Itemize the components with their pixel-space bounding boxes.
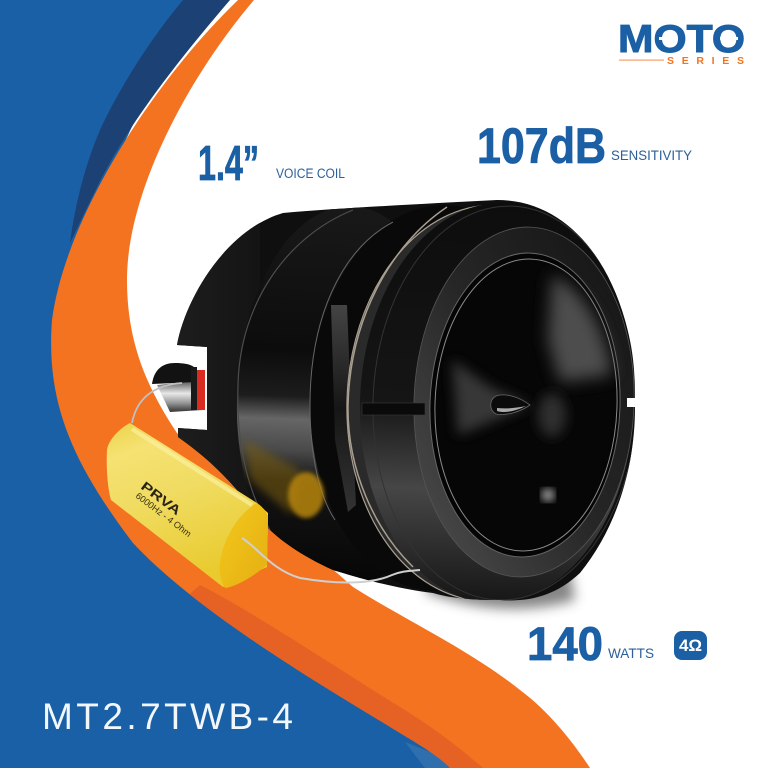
- post dark ring: [191, 367, 197, 410]
- power label: WATTS: [608, 645, 654, 661]
- marker slot: [362, 403, 425, 415]
- swoosh: dark orange shade: [160, 585, 483, 768]
- power value: 140: [527, 617, 603, 670]
- cone: [430, 256, 622, 554]
- impedance badge: [674, 631, 707, 660]
- cone lower right glow: [538, 393, 566, 437]
- logo slit right O: [720, 37, 738, 40]
- binding post connector: [152, 363, 205, 412]
- capacitor end cap: [220, 503, 268, 588]
- gasket edge highlight: [348, 207, 447, 567]
- rim notch: [627, 398, 637, 407]
- sensitivity label: SENSITIVITY: [611, 148, 692, 163]
- product: tweeter driver: [170, 195, 644, 608]
- cone left highlight: [452, 360, 530, 435]
- post red insulator: [197, 370, 205, 410]
- reflection strip: [331, 305, 356, 512]
- model name: MT2.7TWB-4: [42, 696, 296, 737]
- logo slit left O: [659, 37, 676, 40]
- seam highlight: [310, 222, 393, 520]
- logo wordmark: MOTO: [618, 18, 745, 61]
- logo rule: [619, 60, 664, 61]
- gasket ring: [346, 205, 485, 600]
- phase plug tip: [491, 395, 530, 415]
- mid cylinder: [236, 207, 391, 580]
- capacitor brand: PRVA: [138, 478, 185, 519]
- tip highlight: [497, 406, 526, 412]
- second cylinder: [310, 222, 409, 508]
- background: pale blue corner: [405, 742, 470, 768]
- rear textured housing: [177, 222, 260, 491]
- voice coil label: VOICE COIL: [276, 166, 345, 181]
- capacitor wire to post: [132, 383, 182, 423]
- capacitor rating: 6000Hz - 4 Ohm: [134, 491, 193, 539]
- flange seam: [366, 202, 644, 604]
- swoosh: dark blue: [70, 0, 230, 243]
- post silver barrel: [157, 381, 203, 412]
- spec: power: [527, 617, 654, 670]
- driver layered sections: [170, 195, 644, 608]
- sensitivity value: 107dB: [477, 118, 606, 174]
- swoosh: orange band: [51, 0, 590, 768]
- background: blue field: [0, 0, 480, 768]
- capacitor body: [107, 423, 268, 587]
- speaker drop shadow: [425, 570, 575, 609]
- spec: sensitivity: [477, 118, 692, 174]
- yellow capacitor: [107, 423, 268, 588]
- spec: voice coil: [198, 137, 345, 191]
- logo: Moto Series: [618, 18, 745, 67]
- badge background: [674, 631, 707, 660]
- cone outer lip: [425, 250, 625, 560]
- yellow reflection trail: [245, 440, 300, 515]
- front flange: [353, 198, 641, 608]
- capacitor reflection: [288, 472, 324, 518]
- cone right highlight: [548, 275, 612, 382]
- capacitor wire to driver: [242, 538, 420, 583]
- front rim: [408, 223, 640, 581]
- logo subtitle: SERIES: [667, 55, 744, 67]
- capacitor highlight stripe: [132, 429, 252, 505]
- voice coil value: 1.4”: [198, 137, 259, 191]
- badge text: 4Ω: [679, 636, 702, 655]
- driver body silhouette: [177, 200, 635, 600]
- cone spot highlight: [541, 488, 555, 502]
- post black cap: [152, 363, 196, 384]
- mid cylinder seam: [238, 210, 353, 530]
